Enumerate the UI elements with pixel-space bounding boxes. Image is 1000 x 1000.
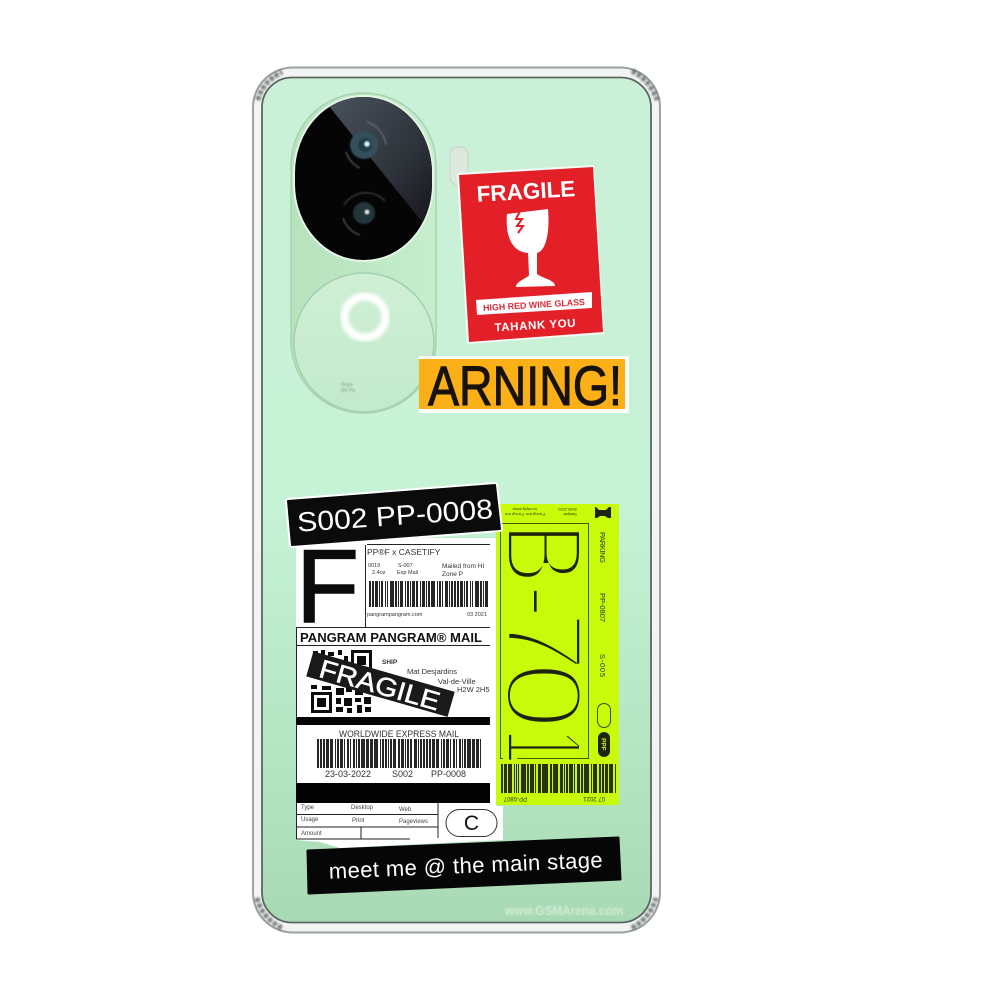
warning sticker: ARNING! (428, 354, 622, 417)
barcode caption: PP-0008 (431, 769, 466, 779)
upper lens (346, 122, 386, 168)
sender block: 0019 (368, 563, 380, 569)
big code: 0 (483, 661, 605, 730)
big code (482, 522, 605, 765)
fragile tape: FRAGILE (316, 653, 443, 716)
model text: Aupa (341, 382, 353, 388)
QR code (311, 650, 372, 713)
big code: 7 (482, 611, 605, 672)
camera glass (293, 95, 436, 262)
ticket side text: S-005 (598, 654, 607, 677)
barcode caption: S002 (392, 769, 413, 779)
S002 sticker: S002 PP-0008 (296, 493, 494, 538)
lower lens (343, 193, 385, 235)
icon: ticket emblem (595, 507, 611, 518)
flash disc (294, 273, 434, 412)
ticket side text (598, 532, 607, 677)
heading: FRAGILE (476, 176, 576, 207)
express heading: WORLDWIDE EXPRESS MAIL (339, 729, 459, 739)
S002 sticker (288, 485, 500, 545)
ship to: Val-de-Ville (438, 677, 476, 686)
big F: F (296, 529, 359, 645)
black bar (296, 717, 490, 725)
ticket side text: PP-0807 (598, 593, 607, 622)
details table: Desktop (351, 805, 374, 811)
sender block: Exp Mail (397, 570, 418, 576)
caption box: HIGH RED WINE GLASS (483, 297, 585, 313)
icon: broken wine glass (507, 209, 555, 287)
ticket barcode (501, 764, 617, 793)
ticket top notes: 2020-2021 (557, 507, 577, 512)
ticket top notes: no-reply-shop (512, 507, 537, 512)
ticket footer: 07 2021 (583, 795, 605, 801)
thank you: TAHANK YOU (494, 318, 576, 334)
sender block (367, 547, 487, 618)
ticket badges: PPF (600, 738, 606, 751)
main stage sticker: meet me @ the main stage (328, 847, 603, 884)
black block (296, 783, 490, 803)
ship to: H2W 2H5 (457, 685, 490, 694)
camera island: Øx Pa (341, 388, 355, 394)
light ring (344, 296, 386, 338)
big code: - (482, 583, 605, 620)
sender block: PP®F x CASETIFY (367, 547, 441, 557)
ticket frame (500, 524, 588, 758)
ticket side text: PARKING (598, 532, 607, 563)
sender block: 03 2021 (467, 612, 487, 618)
shipping label (296, 529, 503, 848)
mail heading: PANGRAM PANGRAM® MAIL (300, 631, 482, 645)
details table: Type (301, 805, 315, 811)
ticket footer (503, 795, 605, 801)
sender block: Mailed from HI (442, 563, 484, 570)
red fragile sticker (457, 165, 604, 344)
C badge (446, 810, 497, 836)
caption box (476, 292, 592, 315)
ship to: Mat Desjardins (407, 667, 457, 676)
details table: Print (352, 818, 365, 824)
C badge: C (464, 812, 479, 835)
ticket badges (598, 704, 610, 757)
details table: Amount (301, 831, 322, 837)
sender block: S-007 (398, 563, 413, 569)
ticket footer: PP-0807 (503, 795, 527, 801)
big code: B (482, 522, 605, 584)
details table: Pageviews (399, 819, 428, 825)
details table: Usage (301, 817, 319, 823)
fragile tape (305, 650, 455, 720)
big code: 1 (482, 728, 604, 765)
phone case (253, 68, 660, 932)
barcode caption (325, 769, 466, 779)
ship to (382, 659, 490, 694)
details table (301, 805, 428, 837)
details table: Web (399, 807, 412, 813)
lime parking ticket (482, 504, 619, 805)
ticket top notes: Sample (563, 512, 577, 517)
sender block: Zone P (442, 571, 463, 578)
ticket top notes: Pangram Pangram (504, 512, 545, 517)
flash window (450, 147, 468, 185)
sender block: 2.4oz (372, 570, 386, 576)
main barcode (317, 739, 481, 768)
main stage sticker (308, 838, 620, 893)
camera island (291, 93, 436, 413)
sender block: pangrampangram.com (367, 612, 423, 618)
barcode caption: 23-03-2022 (325, 769, 371, 779)
top barcode (369, 581, 490, 607)
ship to: SHIP (382, 659, 398, 666)
watermark: www.GSMArena.com (504, 903, 623, 918)
ticket top notes (504, 507, 577, 517)
